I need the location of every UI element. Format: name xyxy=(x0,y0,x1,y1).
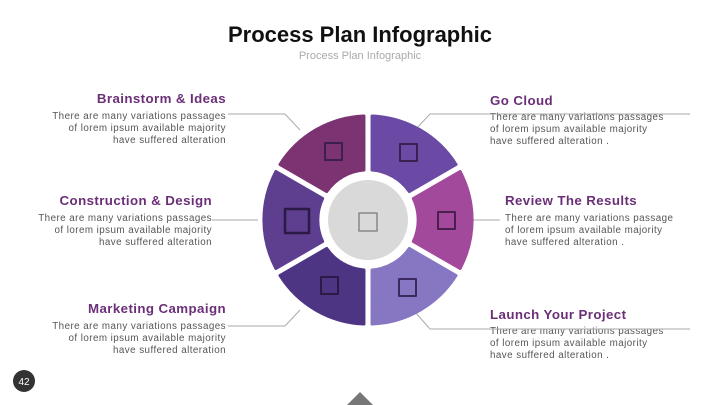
block: review xyxy=(505,193,673,248)
segment: bottom-left xyxy=(274,235,387,334)
segment: top-left xyxy=(274,106,387,205)
block: review: have suffered alteration . xyxy=(505,237,624,248)
block: marketing: of lorem ipsum available majority xyxy=(68,333,226,344)
segment: top-right xyxy=(349,106,462,205)
segment: left xyxy=(264,172,323,268)
block: construction: There are many variations passages xyxy=(38,213,212,224)
block: launch: There are many variations passages xyxy=(490,326,664,337)
page number xyxy=(13,370,35,392)
block: brainstorm: Brainstorm & Ideas xyxy=(97,91,226,106)
block: launch xyxy=(490,307,664,361)
block: construction: Construction & Design xyxy=(60,193,212,208)
block: review: There are many variations passage xyxy=(505,213,673,224)
block: go cloud xyxy=(490,93,664,147)
block: marketing xyxy=(52,301,226,356)
block: go cloud: of lorem ipsum available majority xyxy=(490,124,648,135)
block: launch: Launch Your Project xyxy=(490,307,626,322)
connector lines xyxy=(212,114,690,329)
block: marketing: have suffered alteration xyxy=(113,345,226,356)
block: launch: of lorem ipsum available majority xyxy=(490,338,648,349)
block: review: Review The Results xyxy=(505,193,637,208)
page number: 42 xyxy=(18,377,30,388)
bottom triangle xyxy=(347,392,373,405)
block: launch: have suffered alteration . xyxy=(490,350,609,361)
block: go cloud: There are many variations passages xyxy=(490,112,664,123)
block: marketing: There are many variations passages xyxy=(52,321,226,332)
segment: bottom-right xyxy=(349,235,462,334)
segment: right xyxy=(413,172,472,268)
block: construction: have suffered alteration xyxy=(99,237,212,248)
block: marketing: Marketing Campaign xyxy=(88,301,226,316)
subtitle: Process Plan Infographic xyxy=(299,50,421,62)
block: review: of lorem ipsum available majority xyxy=(505,225,663,236)
block: go cloud: have suffered alteration . xyxy=(490,136,609,147)
title: Process Plan Infographic xyxy=(228,22,492,47)
block: go cloud: Go Cloud xyxy=(490,93,553,108)
block: construction: of lorem ipsum available majority xyxy=(54,225,212,236)
center circle xyxy=(328,180,408,260)
block: brainstorm: There are many variations passages xyxy=(52,111,226,122)
block: brainstorm: have suffered alteration xyxy=(113,135,226,146)
block: brainstorm xyxy=(52,91,226,146)
block: construction xyxy=(38,193,212,248)
block: brainstorm: of lorem ipsum available majority xyxy=(68,123,226,134)
